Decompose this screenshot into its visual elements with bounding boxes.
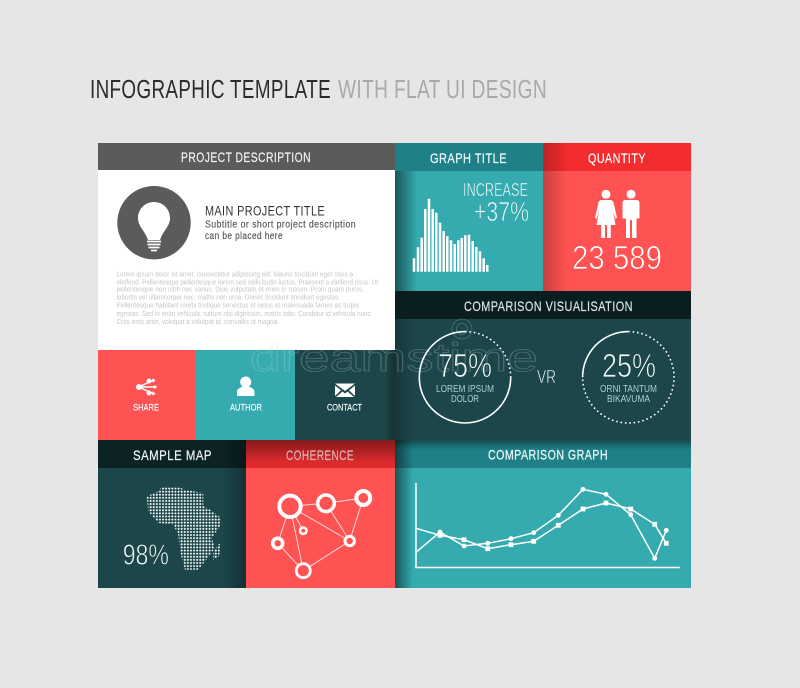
project title and subtitle: can be placed here [205, 231, 283, 242]
donut: 25 percent: BIKAVUMA [607, 393, 650, 405]
donut: 25 percent: 25% [602, 347, 656, 384]
heading: project description [98, 143, 395, 170]
heading: sample map [98, 440, 246, 468]
tile: contact: CONTACT [327, 403, 362, 414]
donut: 75 percent: LOREM IPSUM [436, 383, 494, 395]
donut: 75 percent [419, 332, 511, 423]
watermark [250, 319, 538, 380]
tile: author [196, 350, 295, 440]
network diagram [273, 491, 370, 578]
heading: coherence [246, 440, 395, 468]
icon: envelope [335, 384, 355, 397]
panel: comparison graph [395, 440, 691, 588]
heading: coherence: COHERENCE [286, 447, 354, 463]
panel: comparison visualisation [395, 291, 691, 440]
panel: quantity [543, 143, 691, 291]
lorem ipsum text block: eleifend. Pellentesque pellentesque lorem sed sollicitudin luctus. Praesent a eleifend risus. Ut [116, 279, 378, 286]
tile: share: SHARE [133, 403, 159, 414]
donut: 75 percent: 75% [438, 347, 492, 384]
heading: quantity [543, 143, 691, 171]
donut: 25 percent: ORNI TANTUM [600, 383, 657, 395]
panel: project description [98, 143, 395, 350]
bar chart [414, 199, 487, 272]
lorem ipsum text block: pellentesque non nibh nec varius. Duis vulputate et enim in rutrum. Proin quam purus, [116, 287, 364, 294]
heading: comparison graph: COMPARISON GRAPH [488, 446, 608, 462]
icon: share arrows [136, 378, 158, 396]
heading: comparison visualisation [395, 291, 691, 319]
title: WITH FLAT UI DESIGN [338, 74, 547, 104]
icon: female and male figures [595, 190, 640, 238]
heading: project description: PROJECT DESCRIPTION [181, 149, 311, 165]
panel: graph title [395, 143, 543, 291]
heading: comparison graph [395, 440, 691, 468]
lorem ipsum text block: egestas. Sed in enim vehicula, rutrum nisi dignissim, mattis odio. Curabitur id vehicula nunc. [116, 311, 373, 318]
map: dotted Africa [146, 486, 222, 571]
project title and subtitle: Subtitle or short project description [205, 220, 356, 230]
title: INFOGRAPHIC TEMPLATE [90, 74, 331, 104]
quantity value: 23 589 [572, 239, 662, 276]
heading: graph title: GRAPH TITLE [430, 150, 507, 166]
increase figure: +37% [474, 196, 529, 227]
heading: graph title [395, 143, 543, 171]
icon: person [237, 376, 254, 396]
lorem ipsum text block: Lorem ipsum dolor sit amet, consectetur adipiscing elit. Mauris tincidunt eget risus a [116, 272, 353, 278]
increase figure: INCREASE [463, 180, 528, 200]
heading: comparison visualisation: COMPARISON VISUALISATION [464, 298, 633, 314]
lorem ipsum text block: Pellentesque habitant morbi tristique senectus et netus et malesuada fames ac turpis [116, 302, 359, 310]
line chart [415, 483, 680, 568]
tile: share [98, 350, 196, 440]
donut: 75 percent: DOLOR [451, 393, 479, 405]
donut: 25 percent [583, 332, 674, 423]
lorem ipsum text block [116, 272, 378, 326]
heading: sample map: SAMPLE MAP [133, 447, 212, 463]
lorem ipsum text block: lobortis vel ullamcorper nec, mattis non urna. Donec tincidunt tincidunt egestas. [116, 294, 340, 301]
increase figure [463, 180, 529, 227]
panel: sample map [98, 440, 246, 588]
tile: author: AUTHOR [230, 403, 262, 414]
heading: quantity: QUANTITY [588, 150, 646, 166]
watermark: dreamstime [250, 336, 538, 380]
lorem ipsum text block: Cras eros ante, volutpat a volutpat id, convallis ut magna. [116, 319, 279, 326]
icon: light bulb [117, 186, 191, 259]
panel: coherence [246, 440, 395, 588]
map percentage: 98% [123, 540, 169, 572]
project title and subtitle [205, 202, 356, 242]
tile: contact [295, 350, 395, 440]
project title and subtitle: MAIN PROJECT TITLE [205, 202, 325, 218]
label: versus: VR [537, 367, 556, 387]
